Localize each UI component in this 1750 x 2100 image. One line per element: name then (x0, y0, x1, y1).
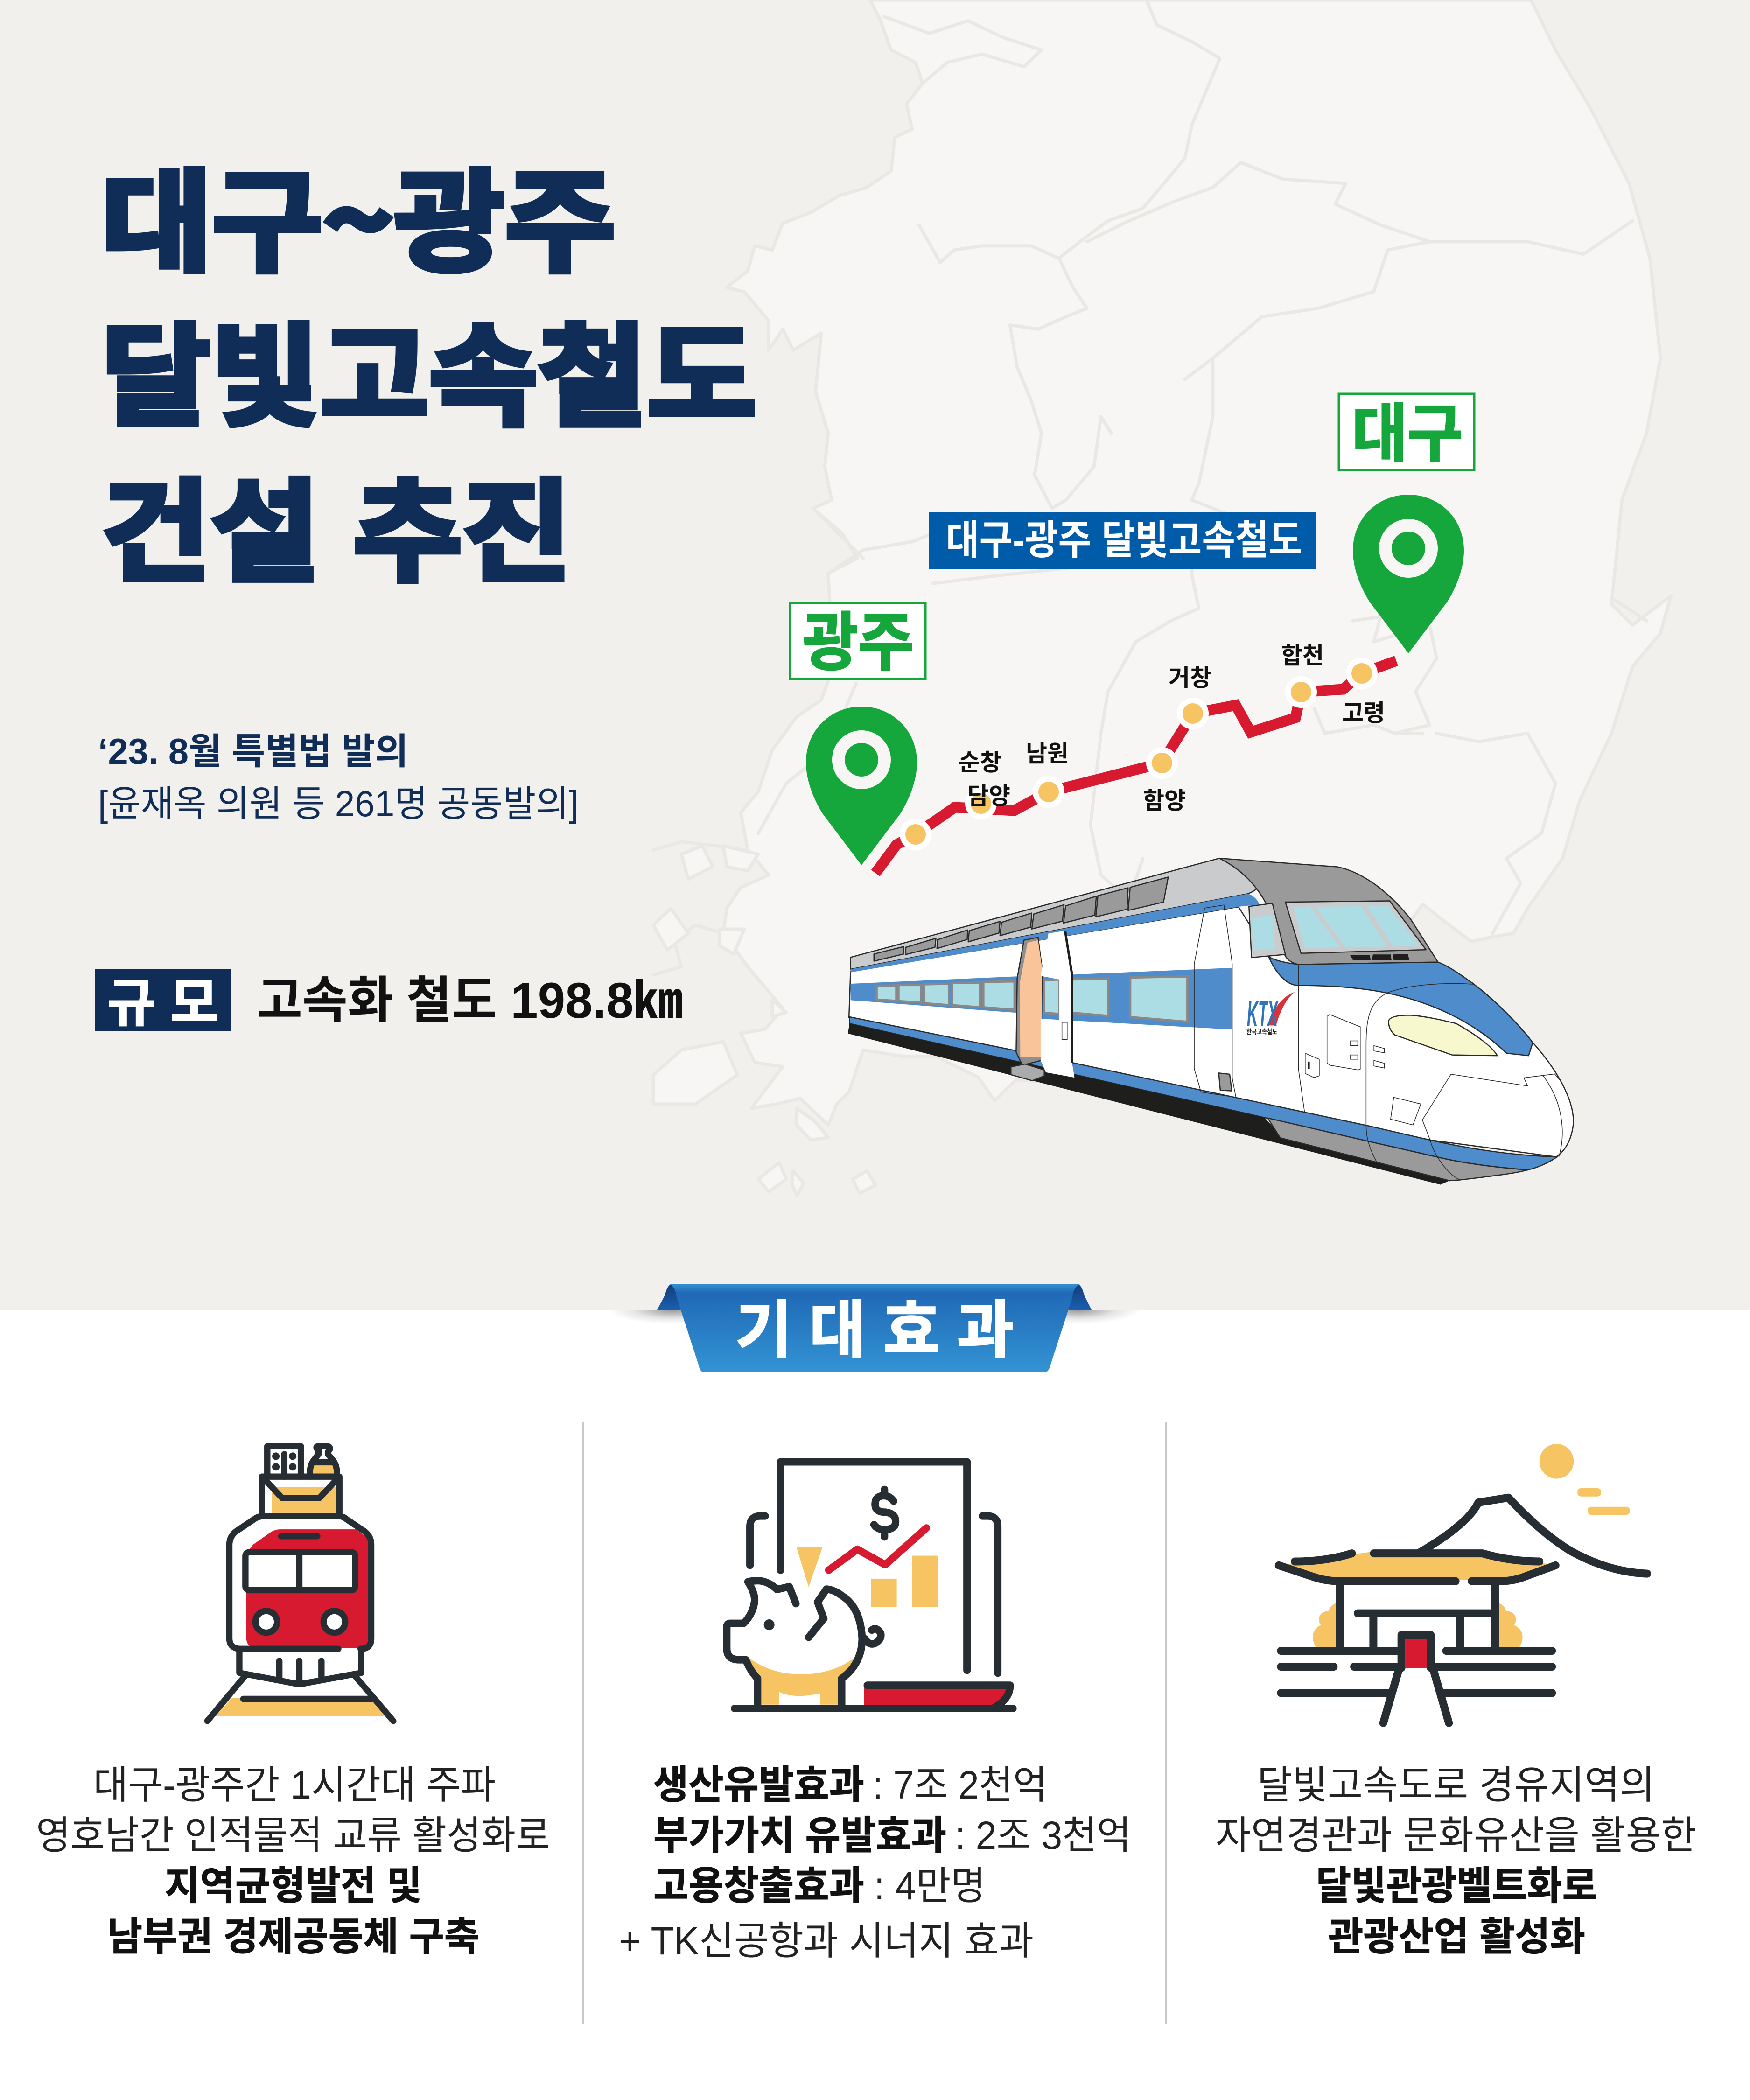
label: Gwangju: 광주 (803, 607, 914, 678)
route banner: 대구-광주 달빛고속철도 (946, 518, 1302, 563)
text: column 3 (1216, 1763, 1696, 1959)
divider (582, 1422, 584, 2024)
panel lines (1194, 905, 1562, 1180)
KTX logo (1246, 993, 1279, 1036)
stop names: 남원 (1026, 741, 1069, 767)
text: column 2: : 4만명 (874, 1864, 986, 1908)
train blue bands (851, 976, 1017, 1013)
panel: upper background (0, 0, 1750, 1310)
text: column 2 (619, 1763, 1131, 1963)
train illustration (848, 858, 1574, 1185)
text: column 1: 대구-광주간 1시간대 주파 (93, 1763, 496, 1807)
shadows of ribbon (617, 1310, 1133, 1322)
text: KTX (1247, 993, 1279, 1034)
KTX swoosh (1267, 992, 1295, 1025)
stop names: 함양 (1143, 788, 1186, 814)
headlight (1388, 1015, 1498, 1056)
train roof (851, 858, 1264, 969)
text: column 3: 달빛고속도로 경유지역의 (1257, 1763, 1655, 1807)
open door (1016, 938, 1042, 1065)
stop names: 합천 (1281, 643, 1324, 669)
text: column 2: : 2조 3천억 (955, 1813, 1131, 1857)
text: column 2: 고용창출효과 (653, 1864, 864, 1908)
route stops (900, 658, 1378, 850)
label: Daegu: 대구 (1352, 399, 1463, 469)
train base (848, 1023, 1449, 1185)
text: column 3: 관광산업 활성화 (1328, 1915, 1585, 1959)
text: column 2: 부가가치 유발효과 (653, 1813, 946, 1857)
bill line 2: [윤재옥 의원 등 261명 공동발의] (98, 783, 579, 824)
text: column 2: + TK신공항과 시너지 효과 (619, 1919, 1034, 1963)
ribbon: expected effects (657, 1284, 1092, 1372)
stop names: 담양 (967, 783, 1010, 809)
title (101, 133, 756, 603)
text: column 3: 자연경관과 문화유산을 활용한 (1216, 1813, 1696, 1857)
ribbon: expected effects: 기대효과 (735, 1296, 1014, 1365)
roof windows (874, 877, 1168, 961)
pin: Gwangju (806, 707, 917, 865)
text: column 2: : 7조 2천억 (873, 1763, 1047, 1807)
bill line 1: ‘23. 8월 특별법 발의 (98, 731, 408, 772)
title line 3: 건설 추진 (101, 442, 572, 603)
icon: train (207, 1446, 393, 1721)
title line 2: 달빛고속철도 (101, 287, 756, 448)
text: column 1: 남부권 경제공동체 구축 (107, 1915, 479, 1959)
text: column 1: 지역균형발전 및 (165, 1864, 422, 1908)
text: column 1 (36, 1763, 550, 1959)
text: column 2: 생산유발효과 (653, 1763, 864, 1807)
route line (875, 661, 1396, 873)
train body white (849, 907, 1574, 1157)
panel: lower white background (0, 1310, 1750, 2100)
stop names: 거창 (1169, 665, 1211, 691)
bill text (98, 731, 579, 824)
stop names (959, 643, 1385, 814)
title line 1: 대구~광주 (101, 133, 616, 294)
map of South Korea (653, 0, 1671, 1196)
scale badge: 규 모 (107, 974, 218, 1032)
KTX logo: 한국고속철도 (1246, 1028, 1277, 1036)
pin: Daegu (1353, 495, 1464, 653)
icon: traditional gate and mountain (1279, 1444, 1647, 1723)
icon: piggy bank and chart (727, 1462, 1013, 1708)
stop names: 고령 (1342, 700, 1385, 726)
side windows (876, 976, 1188, 1022)
stop names: 순창 (959, 749, 1001, 776)
text: column 3: 달빛관광벨트화로 (1316, 1864, 1597, 1908)
cab windows (1285, 901, 1426, 953)
text: column 1: 영호남간 인적물적 교류 활성화로 (36, 1813, 550, 1857)
scale value: 고속화 철도 198.8㎞ (257, 972, 683, 1029)
